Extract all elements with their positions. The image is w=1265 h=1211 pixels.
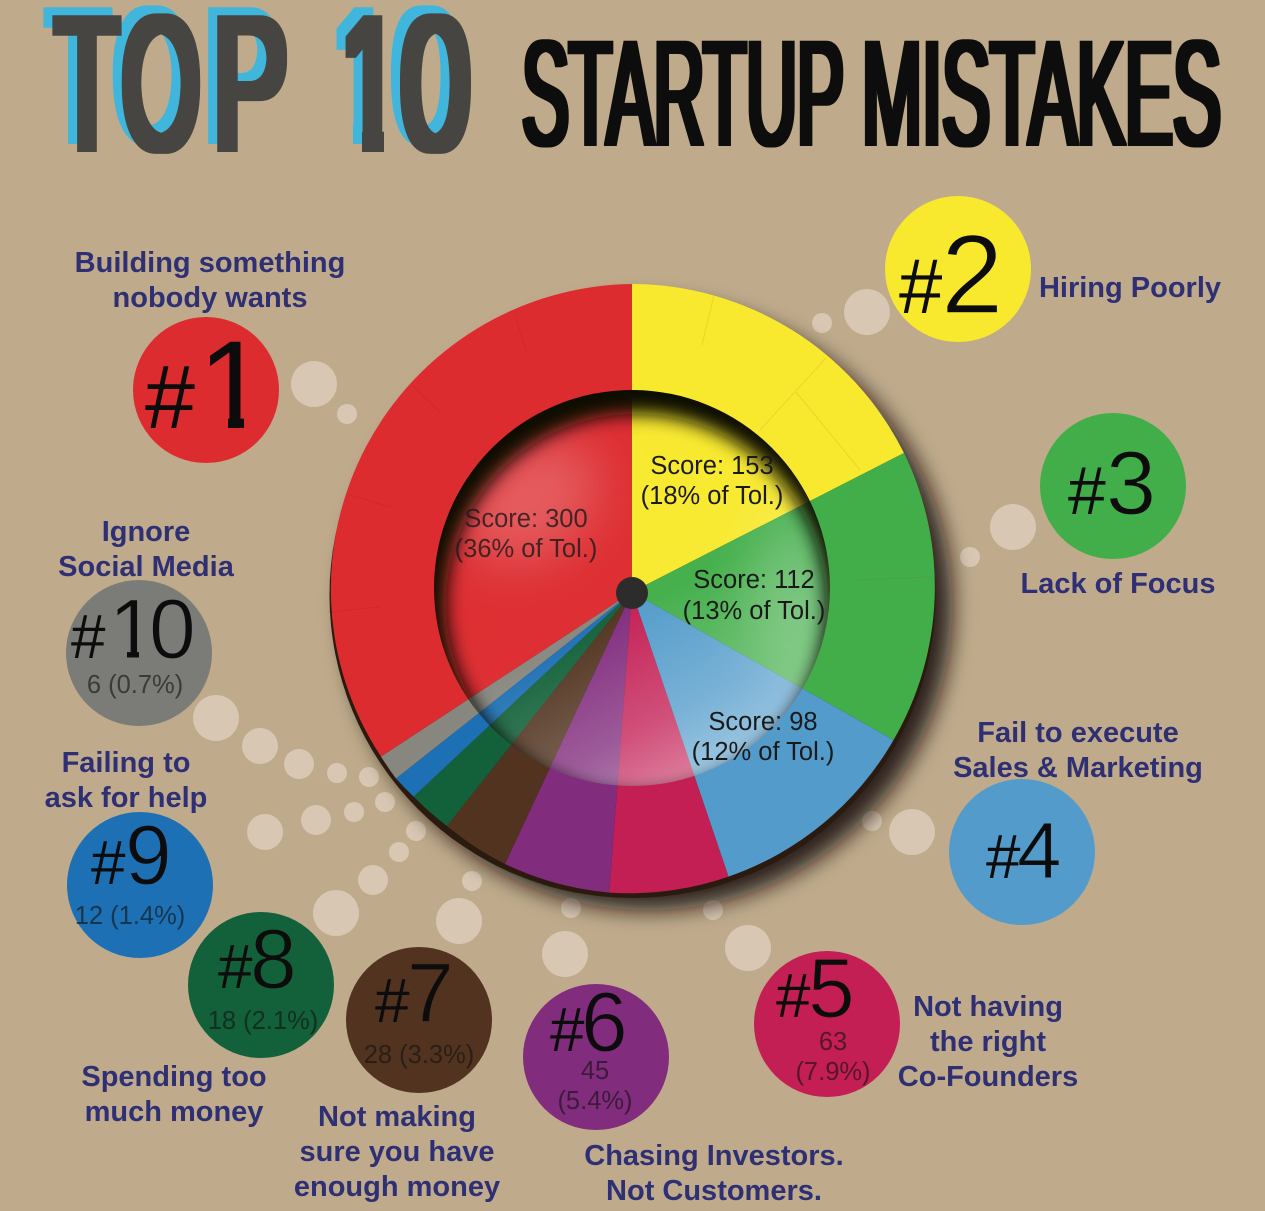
title: TOP 10 [43,5,471,154]
callout #2: 2 [941,212,1003,337]
callout #1: 1 [198,316,268,455]
lens sheen [482,538,830,786]
slice score labels: (18% of Tol.) [641,482,783,510]
callout #3: 3 [1106,434,1156,534]
lens inner shadow [434,390,830,786]
callout #7: # [375,967,410,1036]
callout #5: Not having [913,991,1063,1023]
callout #1: # [145,348,195,448]
callout #9: 9 [125,808,172,902]
pie seams [328,295,932,612]
callout #5: (7.9%) [795,1058,871,1086]
callout #6: 6 [581,975,628,1069]
callout #7: 7 [407,946,454,1040]
center hub [616,577,648,609]
callout #7: sure you have [299,1136,495,1168]
callout #10: 6 (0.7%) [87,671,183,699]
callout #6: (5.4%) [557,1087,633,1115]
callout #5: 63 [819,1028,847,1056]
callout #4: Fail to execute [977,717,1179,749]
callout #8: much money [85,1096,263,1128]
callout #3: Lack of Focus [1020,568,1216,600]
slice score labels: (12% of Tol.) [692,738,834,766]
callout #6: 45 [581,1057,609,1085]
callout #8 [81,912,334,1128]
callout #6: Not Customers. [606,1175,822,1207]
callout #7: Not making [318,1101,476,1133]
callout #5: the right [930,1026,1046,1058]
callout #10: # [71,603,106,672]
slice score labels: Score: 300 [464,505,588,533]
callout #5: Co-Founders [898,1061,1078,1093]
callout #4 [949,717,1203,925]
callout #3 [1020,413,1216,600]
callout #4: Sales & Marketing [953,752,1203,784]
callout #2 [885,196,1221,342]
callout #1: Building something [75,247,345,279]
callout #10: 0 [149,582,196,676]
lens highlight [460,430,616,581]
callout #6: # [550,996,585,1065]
slice score labels: Score: 112 [693,566,815,594]
callout #1: nobody wants [113,282,307,314]
callout #8: # [218,933,253,1002]
callout #9: ask for help [45,782,207,814]
callout #8: 8 [250,912,297,1006]
callout #6 [523,975,844,1207]
slice score labels: (36% of Tol.) [455,535,597,563]
callout #5 [754,941,1078,1097]
callout #4: 4 [1017,806,1062,895]
callout #8: Spending too [81,1061,267,1093]
callout #10: Social Media [58,551,235,583]
callout #7 [294,946,500,1203]
decorative bubbles [193,289,1036,977]
callout #6: Chasing Investors. [584,1140,844,1172]
pie dark rim [330,292,936,898]
callout #9 [45,747,213,958]
pie drop shadow [344,302,952,910]
callout #2: # [899,242,942,330]
pie chart [328,284,952,910]
callout #1 [75,247,345,463]
callout #10 [58,516,235,726]
callout #9: 12 (1.4%) [75,902,185,930]
slice score labels [455,452,834,766]
callout #7: 28 (3.3%) [364,1041,474,1069]
callout #4: # [986,823,1021,892]
slice score labels: (13% of Tol.) [683,597,825,625]
callout #8: 18 (2.1%) [208,1007,318,1035]
callout #3: # [1068,453,1106,529]
pie slices [331,284,935,893]
callout #9: # [91,829,126,898]
callout #2: Hiring Poorly [1039,272,1221,304]
callout #10: 1 [109,582,156,676]
callout #10: Ignore [102,516,190,548]
callout #5: # [776,962,811,1031]
slice score labels: Score: 98 [708,708,818,736]
slice score labels: Score: 153 [650,452,774,480]
title: STARTUP MISTAKES: STARTUP [522,9,844,177]
magnifying lens [434,390,830,786]
callout #5: 5 [808,941,855,1035]
callout #9: Failing to [62,747,190,779]
callout #7: enough money [294,1171,500,1203]
